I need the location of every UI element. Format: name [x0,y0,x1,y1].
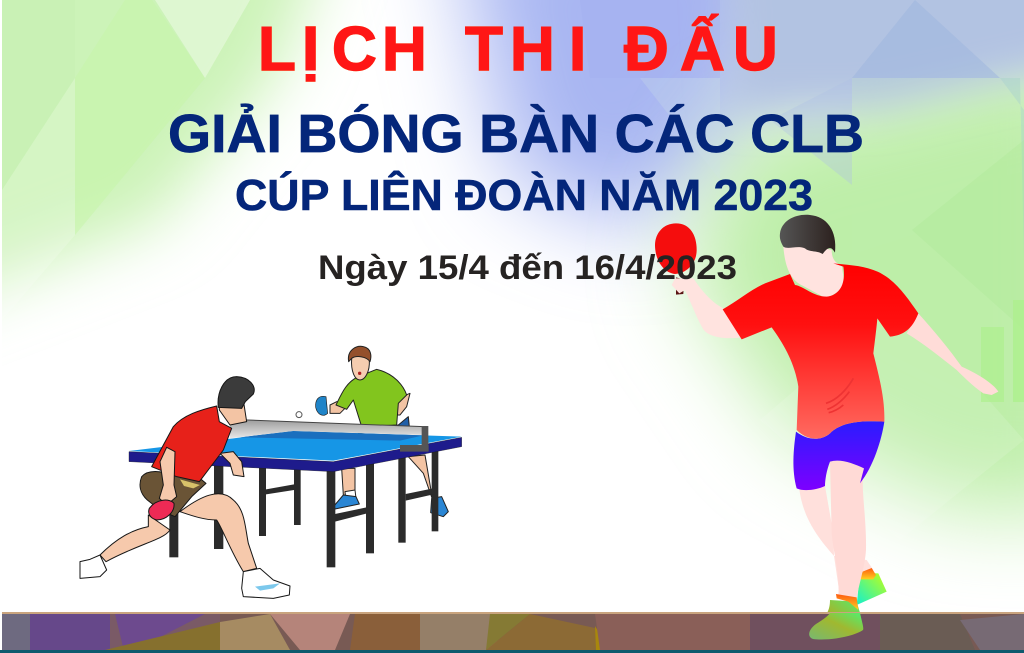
paddle [655,223,697,274]
illustration: two players at a table tennis table [80,346,462,598]
back shoe [857,573,887,605]
title: LỊCH THI ĐẤU [258,15,778,84]
faceted floor colours [2,614,1024,653]
neck and face [783,243,845,299]
ball [296,412,302,418]
back leg [799,486,834,556]
front shoe [809,600,863,639]
lowered arm [907,313,998,395]
net [230,419,423,438]
date: Ngày 15/4 đến 16/4/2023 [318,249,737,287]
shirt folds [826,378,853,413]
table legs and crossbars [169,450,438,567]
front leg [830,461,866,598]
subtitle: tournament name: GIẢI BÓNG BÀN CÁC CLB [168,104,864,164]
floor band [0,612,1024,653]
player in red shirt [80,377,290,598]
player on the right in red shirt [655,215,998,639]
hair [780,215,835,254]
subtitle: cup name: CÚP LIÊN ĐOÀN NĂM 2023 [235,170,813,220]
opponent in green shirt [330,346,448,517]
shorts [793,421,884,490]
shirt [723,263,918,439]
opponent paddle [316,396,328,415]
shoe overlapping floor [809,613,863,640]
table top [129,437,462,472]
raised arm [672,278,742,338]
